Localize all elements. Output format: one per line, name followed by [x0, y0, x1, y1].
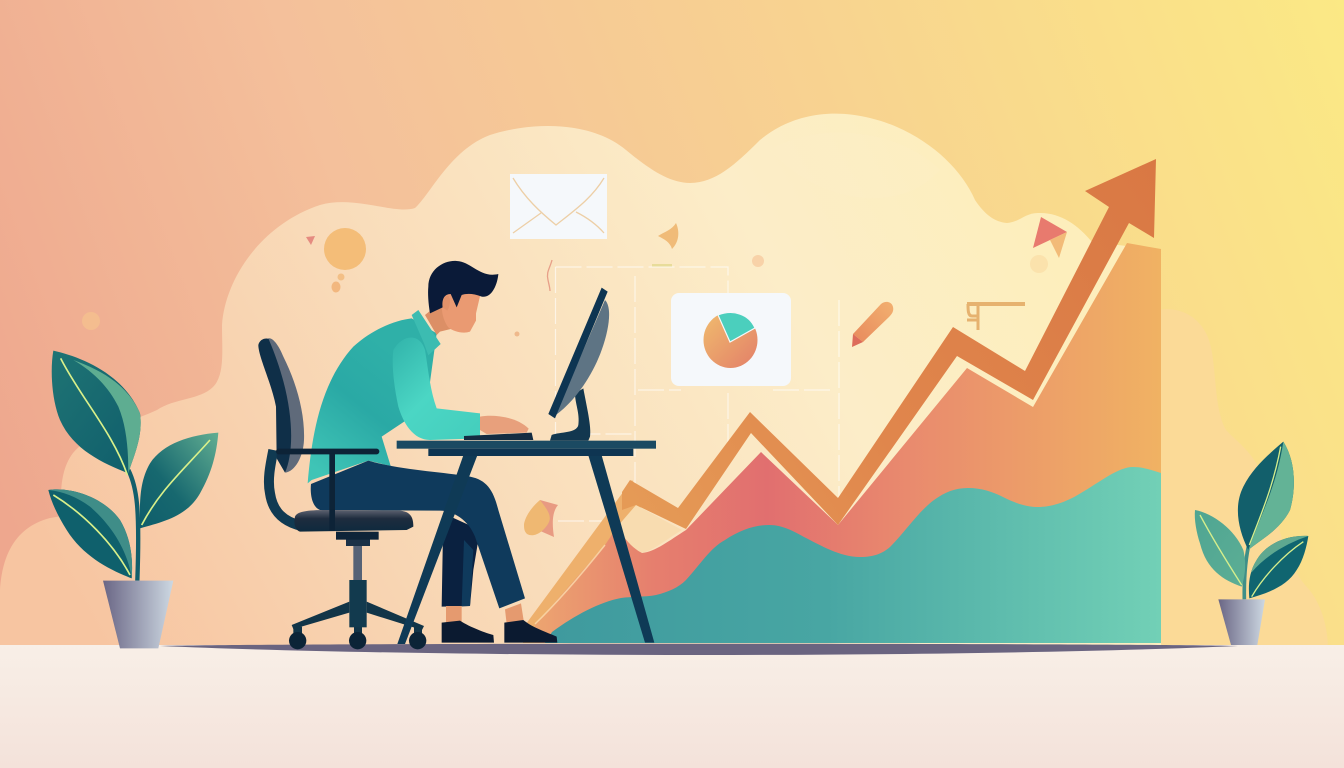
- icon: paper plane: [1033, 217, 1067, 258]
- pot: [103, 581, 173, 648]
- trousers: [311, 461, 525, 608]
- monitor: [548, 288, 609, 441]
- background cloud: soft highlight: [770, 133, 940, 198]
- left leaf: [1195, 510, 1245, 587]
- chair back: [258, 338, 304, 473]
- background cloud: right: [1150, 309, 1328, 650]
- monitor stand: [550, 388, 590, 441]
- shirt body: [308, 318, 437, 483]
- shoes: [442, 620, 557, 643]
- neck: [425, 300, 453, 335]
- monitor back: [555, 300, 609, 416]
- desk leg right: [588, 455, 654, 643]
- armrest post front: [329, 510, 335, 531]
- icon: floating shard: [524, 500, 558, 537]
- desk leg left: [397, 455, 477, 644]
- dashed guide lines: [556, 267, 839, 521]
- chart: orange back layer: [523, 480, 642, 643]
- hair: [428, 261, 498, 313]
- ankles: [446, 603, 524, 624]
- decorative dots: [82, 255, 1048, 336]
- floor: [0, 645, 1344, 768]
- armrest: [276, 449, 379, 531]
- person: [308, 261, 557, 643]
- upper leaf: [52, 351, 141, 475]
- icon: pencil: [852, 302, 893, 347]
- floor shadow: [160, 644, 1238, 655]
- chart: rising arrow: [622, 159, 1156, 529]
- hand: [480, 416, 529, 434]
- chart: teal area: [545, 467, 1161, 643]
- plant stem: [128, 470, 138, 581]
- icon: floating leaf: [658, 223, 678, 249]
- right leaf: [1249, 536, 1308, 598]
- chair column: [336, 532, 379, 627]
- plant: right: [1195, 442, 1308, 645]
- pot: [1218, 599, 1265, 645]
- desk: [397, 441, 656, 644]
- desk top: [397, 441, 656, 449]
- lower leaf: [48, 489, 132, 578]
- background cloud: main: [0, 114, 1161, 650]
- icon: pie chart card: [671, 293, 791, 386]
- chart: window under arrow: [617, 505, 682, 553]
- plant stem: [1244, 547, 1248, 599]
- keyboard: [464, 433, 533, 440]
- person at desk scene: [258, 261, 656, 649]
- icon: orange sun circle: [306, 228, 366, 292]
- icon: squiggle: [547, 260, 552, 291]
- monitor screen edge: [548, 288, 608, 418]
- chart: coral and orange area: [535, 243, 1161, 643]
- right leaf: [140, 433, 218, 528]
- chair base: [289, 602, 426, 649]
- face: [442, 293, 481, 333]
- back lower leg: [442, 513, 480, 607]
- ear: [443, 296, 450, 311]
- icon: tool: [967, 304, 1025, 330]
- sleeve: [393, 337, 480, 440]
- desk underside: [428, 449, 633, 456]
- collar: [412, 310, 441, 355]
- icon: envelope card: [510, 174, 607, 239]
- chair: [258, 338, 426, 649]
- chair frame: [269, 450, 302, 526]
- top leaf: [1238, 442, 1294, 550]
- plant: left: [48, 351, 218, 648]
- icon: green dash: [652, 264, 672, 266]
- chair seat: [294, 510, 413, 532]
- chart: highlight line: [535, 545, 605, 624]
